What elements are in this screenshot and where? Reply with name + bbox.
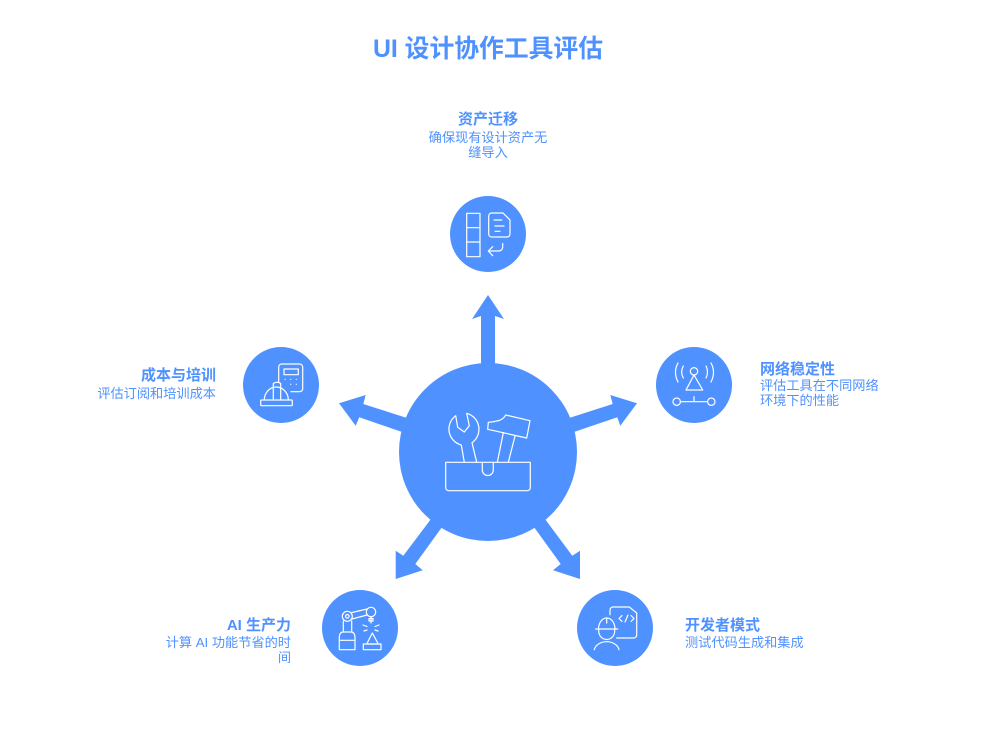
label: developer mode: 开发者模式 <box>685 616 760 634</box>
label: cost and training: 评估订阅和培训成本 <box>97 386 216 401</box>
icon: table and document <box>467 213 510 257</box>
label: network stability: 环境下的性能 <box>760 393 839 408</box>
arrow: lower left <box>396 515 445 579</box>
icon: toolbox <box>446 413 530 491</box>
arrow: up <box>472 295 504 370</box>
label: network stability: 网络稳定性 <box>760 360 835 378</box>
label: cost and training: 成本与培训 <box>141 366 216 384</box>
label: asset migration <box>429 111 547 160</box>
arrow: lower right <box>531 515 580 579</box>
label: cost and training <box>97 366 216 401</box>
label: AI productivity: AI 生产力 <box>227 617 291 634</box>
node: AI productivity <box>322 590 398 666</box>
icon: calculator and helmet <box>261 364 303 406</box>
central hub <box>399 363 577 541</box>
label: asset migration: 缝导入 <box>468 145 508 160</box>
arrow: upper right <box>566 395 637 433</box>
node: developer mode <box>577 590 653 666</box>
label: AI productivity <box>166 617 291 665</box>
arrows from hub <box>339 295 637 579</box>
node: cost and training <box>243 347 319 423</box>
label: network stability <box>760 360 879 408</box>
arrow: upper left <box>339 395 410 433</box>
label: developer mode: 测试代码生成和集成 <box>685 635 804 650</box>
label: developer mode <box>685 616 804 650</box>
icon: engineer and code file <box>594 607 637 650</box>
label: asset migration: 确保现有设计资产无 <box>429 130 547 145</box>
icon: robot arm <box>339 607 381 650</box>
node: asset migration <box>450 196 526 272</box>
label: AI productivity: 间 <box>278 650 291 665</box>
label: AI productivity: 计算 AI 功能节省的时 <box>166 635 291 650</box>
node: network stability <box>656 347 732 423</box>
label: asset migration: 资产迁移 <box>458 111 518 128</box>
label: network stability: 评估工具在不同网络 <box>760 378 879 393</box>
icon: antenna <box>673 363 715 405</box>
title: UI 设计协作工具评估 <box>373 35 603 63</box>
